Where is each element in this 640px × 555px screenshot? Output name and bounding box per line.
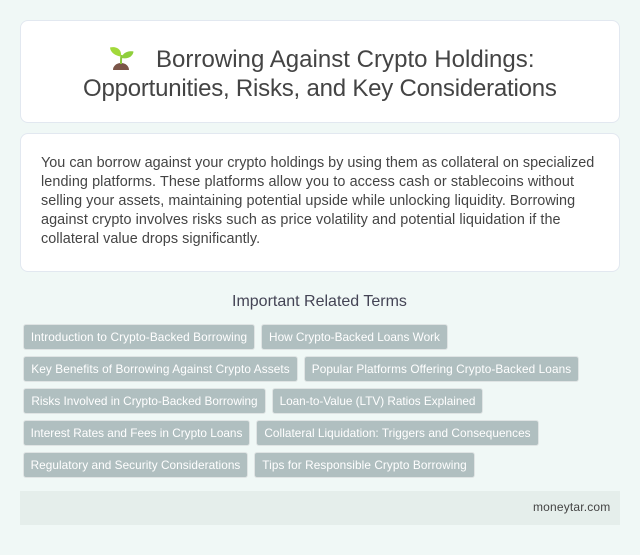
- description text: collateral value drops significantly.: [41, 231, 260, 247]
- tag: [261, 324, 448, 350]
- title: Borrowing Against Crypto Holdings:: [156, 46, 535, 73]
- tag: Risks Involved in Crypto-Backed Borrowing: [31, 394, 258, 408]
- tag: Collateral Liquidation: Triggers and Consequences: [264, 426, 531, 440]
- tag: Interest Rates and Fees in Crypto Loans: [31, 426, 242, 440]
- tag: Popular Platforms Offering Crypto-Backed Loans: [312, 362, 571, 376]
- title line 2: Opportunities, Risks, and Key Considerations: [83, 75, 557, 102]
- title card: [20, 20, 620, 123]
- tag: Tips for Responsible Crypto Borrowing: [262, 458, 467, 472]
- tag: [256, 420, 539, 446]
- tag: Loan-to-Value (LTV) Ratios Explained: [280, 394, 475, 408]
- tag: [23, 356, 298, 382]
- icon: seedling: [110, 47, 134, 70]
- tag: How Crypto-Backed Loans Work: [269, 330, 440, 344]
- panel: description: [20, 133, 620, 272]
- description text: against crypto involves risks such as price volatility and potential liquidation if the: [41, 212, 561, 228]
- tag: [272, 388, 483, 414]
- tag: Key Benefits of Borrowing Against Crypto Assets: [31, 362, 290, 376]
- heading: related terms: Important Related Terms: [232, 293, 407, 310]
- description text: selling your assets, maintaining potential upside while unlocking liquidity. Borrowing: [41, 193, 575, 209]
- tag: [304, 356, 579, 382]
- description text: lending platforms. These platforms allow you to access cash or stablecoins without: [41, 174, 574, 190]
- footer text: moneytar.com: [533, 500, 610, 514]
- description text: You can borrow against your crypto holdings by using them as collateral on specialized: [41, 155, 594, 171]
- tag: [23, 388, 266, 414]
- footer bar: [20, 491, 620, 525]
- tag: [23, 324, 255, 350]
- tag: Introduction to Crypto-Backed Borrowing: [31, 330, 247, 344]
- tag: [254, 452, 475, 478]
- tag: Regulatory and Security Considerations: [31, 458, 240, 472]
- description text: [41, 155, 594, 247]
- tag: [23, 420, 250, 446]
- tag: [23, 452, 248, 478]
